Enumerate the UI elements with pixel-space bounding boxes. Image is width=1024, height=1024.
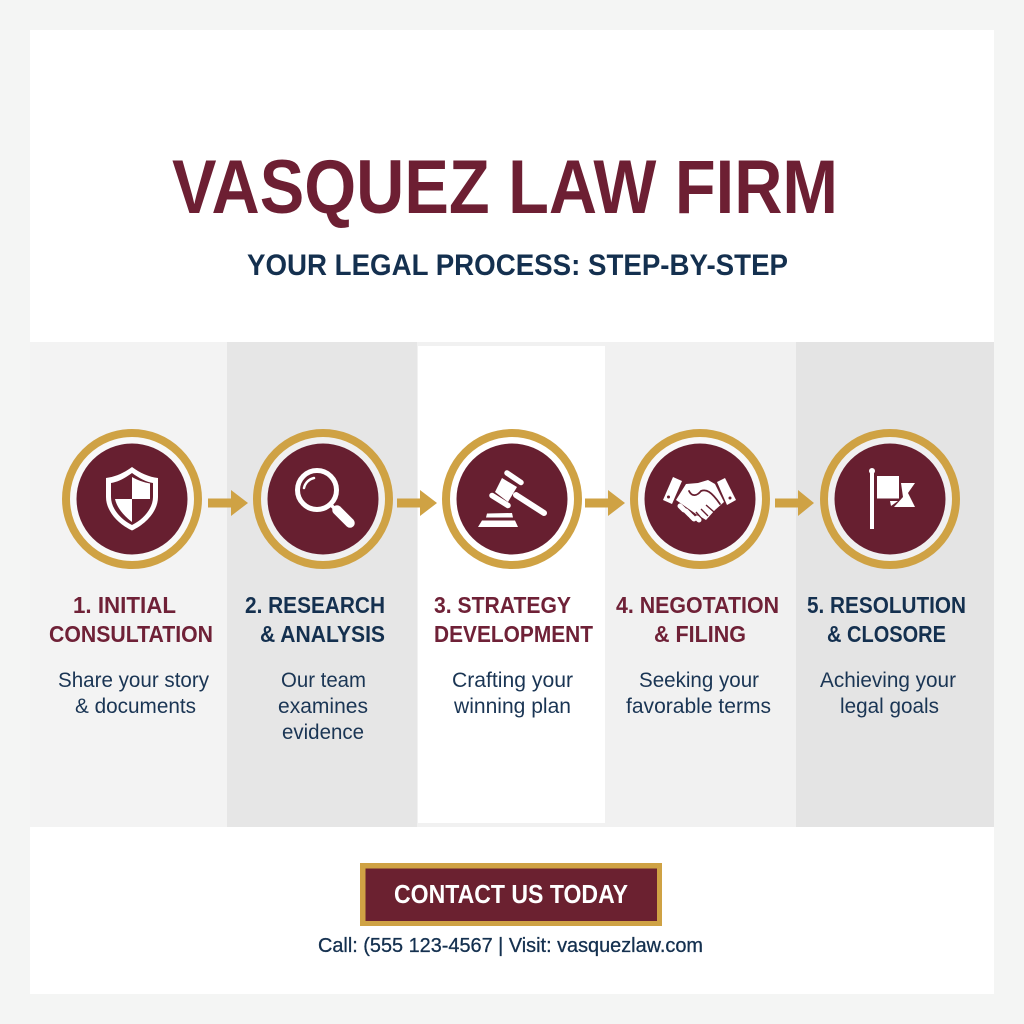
icon: gavel	[478, 473, 544, 527]
arrow: step 3 to 4	[585, 490, 625, 516]
step 1 heading: CONSULTATION	[49, 621, 213, 647]
step 2 description	[278, 668, 368, 744]
circle badge 5	[824, 433, 956, 565]
circle badge 1	[66, 433, 198, 565]
step 5 description: Achieving your	[820, 668, 956, 692]
button: contact us today	[360, 863, 662, 926]
panel: step 5 resolution and closure	[796, 342, 994, 827]
step 1 description: Share your story	[58, 668, 209, 692]
step 1 heading	[49, 592, 213, 647]
contact details: Call: (555 123-4567 | Visit: vasquezlaw.com	[318, 934, 703, 957]
icon: shield	[106, 467, 158, 530]
step 1 heading: 1. INITIAL	[73, 592, 176, 618]
title: VASQUEZ LAW FIRM	[172, 145, 838, 230]
step 2 heading: & ANALYSIS	[260, 621, 385, 647]
step 2 heading	[245, 592, 385, 647]
arrow: step 4 to 5	[775, 490, 814, 516]
step 4 heading	[616, 592, 779, 647]
step 4 description	[626, 668, 771, 718]
button: contact us today: CONTACT US TODAY	[394, 879, 628, 909]
icon: magnifying glass	[298, 470, 350, 523]
step 5 heading: 5. RESOLUTION	[807, 592, 966, 618]
step 4 heading: & FILING	[654, 621, 746, 647]
step 4 description: favorable terms	[626, 694, 771, 718]
step 4 description: Seeking your	[639, 668, 759, 692]
step 3 heading: DEVELOPMENT	[434, 621, 594, 647]
panel: step 1 initial consultation	[30, 342, 227, 827]
step 2 description: Our team	[281, 668, 366, 692]
step 1 description: & documents	[75, 694, 196, 718]
circle badge 4	[634, 433, 766, 565]
step 3 heading	[434, 592, 594, 647]
panel: step 3 strategy development	[417, 342, 606, 827]
arrow: step 1 to 2	[208, 490, 248, 516]
step 4 heading: 4. NEGOTATION	[616, 592, 779, 618]
step 2 heading: 2. RESEARCH	[245, 592, 385, 618]
step 3 description: Crafting your	[452, 668, 573, 692]
step 1 description	[58, 668, 209, 718]
step 2 description: evidence	[282, 720, 364, 744]
circle badge 2	[257, 433, 389, 565]
circle badge 3	[446, 433, 578, 565]
step 3 description	[452, 668, 573, 718]
step 5 description	[820, 668, 956, 718]
subtitle: YOUR LEGAL PROCESS: STEP-BY-STEP	[247, 249, 788, 282]
step 3 description: winning plan	[453, 694, 571, 718]
step 5 heading	[807, 592, 966, 647]
panel: step 2 research and analysis	[227, 342, 417, 827]
icon: flag	[869, 468, 915, 529]
step 5 description: legal goals	[840, 694, 939, 718]
step 3 heading: 3. STRATEGY	[434, 592, 571, 618]
step 5 heading: & CLOSORE	[827, 621, 946, 647]
arrow: step 2 to 3	[397, 490, 437, 516]
step 2 description: examines	[278, 694, 368, 718]
panel: step 4 negotiation and filing	[606, 342, 796, 827]
icon: handshake	[663, 477, 736, 520]
